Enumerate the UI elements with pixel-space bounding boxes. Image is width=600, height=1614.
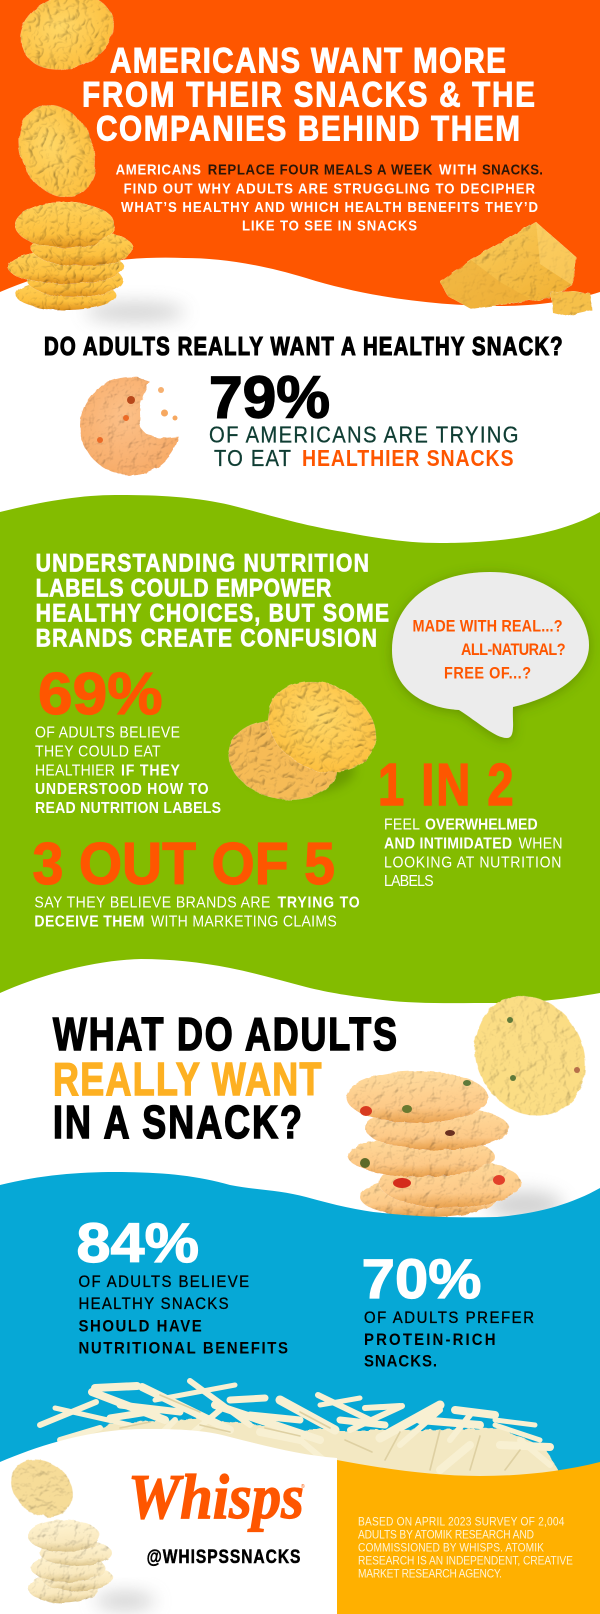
- icon: veggie snack stack: [346, 1071, 521, 1217]
- icon: two snacks: [221, 664, 391, 810]
- intro text: AMERICANS: [116, 160, 201, 177]
- title: AMERICANS WANT MORE: [110, 41, 506, 80]
- source text: ADULTS BY ATOMIK RESEARCH AND: [358, 1529, 534, 1542]
- stat: 70%: 70%: [362, 1247, 481, 1310]
- icon: flying snack: [453, 976, 600, 1136]
- panel: orange header: [0, 0, 600, 321]
- logo: Whisps: Whisps: [128, 1461, 304, 1532]
- stat: 1 in 2: [378, 753, 563, 890]
- panel: blue stats: [0, 1172, 600, 1500]
- stat: 84%: 84%: [76, 1211, 199, 1274]
- stat: 3 out of 5: SAY THEY BELIEVE BRANDS ARE: [34, 894, 270, 912]
- stat: 1 in 2: AND INTIMIDATED: [384, 834, 512, 853]
- stat description: [209, 421, 518, 471]
- icon: wedge of cheese: [440, 222, 592, 316]
- icon: plain snack stack: [28, 1520, 155, 1609]
- heading: DO ADULTS REALLY WANT A HEALTHY SNACK?: [44, 332, 563, 361]
- icon: shadow under snack stack: [85, 303, 185, 321]
- stat description: OF AMERICANS ARE TRYING: [209, 421, 518, 448]
- stat: 1 in 2: FEEL: [384, 815, 420, 834]
- intro text: WHAT’S HEALTHY AND WHICH HEALTH BENEFITS THEY’D: [121, 198, 538, 215]
- stat: 1 in 2: LOOKING AT NUTRITION: [384, 853, 561, 872]
- stat: 3 out of 5: TRYING TO: [278, 894, 360, 912]
- stat: 69%: IF THEY: [121, 761, 180, 780]
- source text: MARKET RESEARCH AGENCY.: [358, 1568, 502, 1581]
- stat: 1 in 2: 1 IN 2: [378, 753, 514, 818]
- stat: 1 in 2: WHEN: [519, 834, 563, 853]
- source text: COMMISSIONED BY WHISPS. ATOMIK: [358, 1542, 545, 1555]
- intro text: FIND OUT WHY ADULTS ARE STRUGGLING TO DECIPHER: [124, 179, 535, 196]
- stat: 3 out of 5: 3 OUT OF 5: [32, 831, 335, 897]
- title: [82, 41, 535, 148]
- icon: shredded cheese: [40, 1381, 565, 1482]
- icon: shadow under stack: [487, 1191, 563, 1219]
- stat: 70%: PROTEIN-RICH: [364, 1331, 496, 1349]
- heading: BRANDS CREATE CONFUSION: [36, 624, 377, 652]
- title: COMPANIES BEHIND THEM: [96, 109, 520, 148]
- panel: footer brand: [0, 1429, 337, 1614]
- icon: bitten snack: [80, 377, 192, 475]
- stat description: HEALTHIER SNACKS: [302, 446, 514, 471]
- panel: what do adults want: [53, 976, 600, 1219]
- stat: 69%: OF ADULTS BELIEVE: [35, 724, 180, 742]
- intro text: LIKE TO SEE IN SNACKS: [242, 217, 417, 234]
- icon: snack stack: [8, 202, 133, 310]
- stat description: TO EAT: [214, 445, 291, 471]
- icon: flying snack two: [4, 92, 110, 210]
- intro text: REPLACE FOUR MEALS A WEEK: [208, 160, 433, 177]
- stat: 84%: OF ADULTS BELIEVE: [78, 1273, 249, 1291]
- heading: REALLY WANT: [53, 1054, 321, 1105]
- heading: [36, 549, 389, 652]
- stat: 70%: OF ADULTS PREFER: [364, 1309, 534, 1327]
- panel: green nutrition labels: [0, 495, 600, 1003]
- speech bubble: MADE WITH REAL...?: [412, 618, 563, 636]
- source text: [358, 1516, 573, 1581]
- heading: [53, 1009, 397, 1148]
- panel: survey source: [337, 1460, 600, 1614]
- speech bubble: [392, 572, 589, 738]
- source text: RESEARCH IS AN INDEPENDENT, CREATIVE: [358, 1555, 573, 1568]
- intro text: WITH: [439, 160, 476, 177]
- stat: 69%: THEY COULD EAT: [35, 743, 161, 761]
- title: FROM THEIR SNACKS & THE: [82, 75, 535, 114]
- source text: BASED ON APRIL 2023 SURVEY OF 2,004: [358, 1516, 564, 1529]
- stat: 84%: [76, 1211, 288, 1358]
- speech bubble: FREE OF...?: [444, 664, 531, 683]
- intro text: SNACKS.: [482, 160, 543, 177]
- stat: 69%: UNDERSTOOD HOW TO: [35, 780, 209, 798]
- stat: 84%: HEALTHY SNACKS: [78, 1295, 229, 1313]
- stat: 79%: 79%: [209, 364, 330, 430]
- stat: 1 in 2: LABELS: [384, 872, 434, 890]
- stat: 3 out of 5: WITH MARKETING CLAIMS: [151, 913, 337, 931]
- social handle: @WHISPSSNACKS: [147, 1546, 300, 1567]
- heading: IN A SNACK?: [53, 1097, 302, 1148]
- stat: 69%: HEALTHIER: [35, 761, 115, 780]
- icon: flying plain snack: [0, 1448, 84, 1528]
- heading: HEALTHY CHOICES, BUT SOME: [36, 599, 389, 627]
- stat: 70%: [362, 1247, 534, 1371]
- panel: do adults want a healthy snack: [44, 332, 563, 475]
- intro text: [116, 160, 543, 234]
- icon: flying snack one: [10, 0, 124, 82]
- stat: 69%: 69%: [38, 661, 163, 727]
- stat: 69%: [35, 661, 221, 817]
- stat: 1 in 2: OVERWHELMED: [425, 815, 538, 834]
- heading: LABELS COULD EMPOWER: [36, 574, 332, 602]
- logo: Whisps: ®: [301, 1483, 305, 1490]
- stat: 70%: SNACKS.: [364, 1353, 437, 1371]
- stat: 84%: NUTRITIONAL BENEFITS: [78, 1339, 288, 1358]
- heading: UNDERSTANDING NUTRITION: [36, 549, 369, 577]
- stat: 69%: READ NUTRITION LABELS: [35, 799, 221, 817]
- stat: 3 out of 5: [32, 831, 360, 931]
- stat: 84%: SHOULD HAVE: [78, 1318, 202, 1336]
- heading: WHAT DO ADULTS: [53, 1009, 397, 1060]
- speech bubble: ALL-NATURAL?: [461, 641, 566, 659]
- stat: 3 out of 5: DECEIVE THEM: [34, 913, 144, 931]
